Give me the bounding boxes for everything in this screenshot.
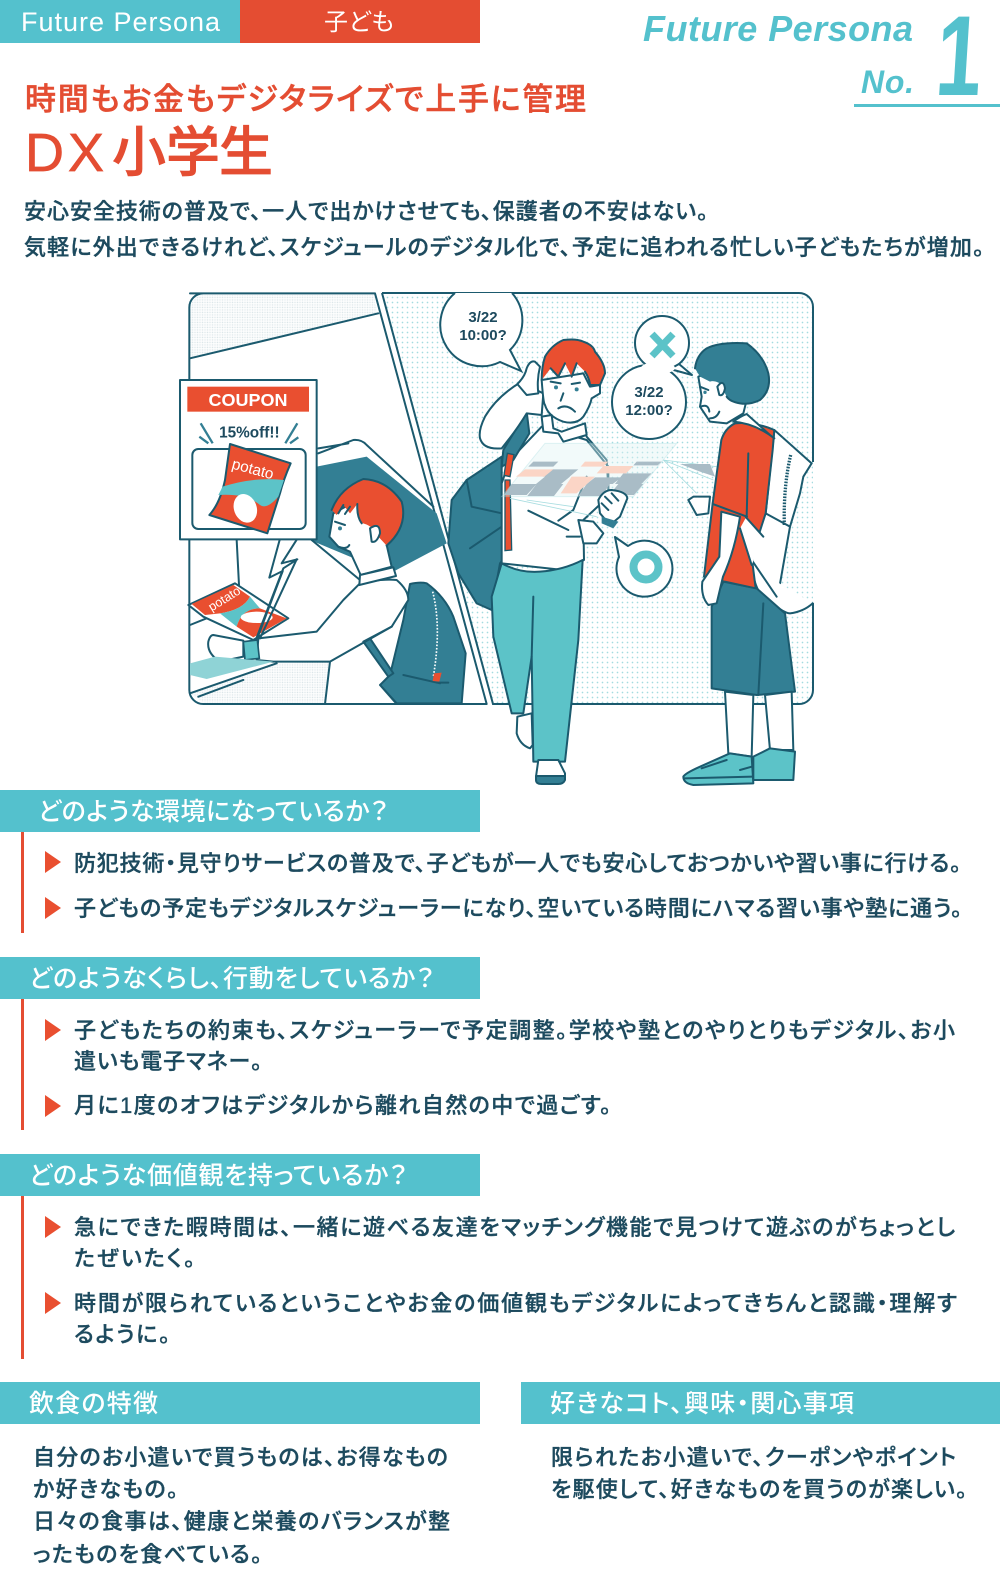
intro text: 安心安全技術の普及で、一人で出かけさせても、保護者の不安はない。 xyxy=(24,199,708,224)
illustration: children with digital schedule xyxy=(180,293,813,785)
persona number badge: No. xyxy=(861,64,914,100)
section: lifestyle: 子どもたちの約束も、スケジューラーで予定調整。学校や塾とのやりとりもデジタル、お小 xyxy=(74,1018,955,1043)
raised arm xyxy=(480,383,543,449)
section: values xyxy=(0,1154,957,1359)
panel: food and drink xyxy=(0,1382,480,1567)
section: environment: どのような環境になっているか？ xyxy=(38,798,388,826)
title: DX小学生 xyxy=(25,123,273,183)
shorts xyxy=(712,582,795,695)
header tab: category xyxy=(240,0,480,43)
section: values: たぜいたく。 xyxy=(74,1246,195,1271)
persona number badge: Future Persona xyxy=(643,8,913,49)
counter tray xyxy=(190,657,273,679)
white backpack xyxy=(752,430,812,593)
section: lifestyle xyxy=(0,957,955,1130)
panel: interests xyxy=(521,1382,1000,1502)
speech bubble: accepted xyxy=(615,537,672,597)
panel: interests: 限られたお小遣いで、クーポンやポイント xyxy=(551,1445,956,1470)
section: lifestyle: 月に1度のオフはデジタルから離れ自然の中で過ごす。 xyxy=(74,1093,611,1118)
pants xyxy=(492,560,583,762)
coupon card xyxy=(180,380,317,539)
speech bubble: 10:00: 10:00? xyxy=(459,327,507,344)
intro text: 気軽に外出できるけれど、スケジュールのデジタル化で、予定に追われる忙しい子どもたちが増加。 xyxy=(24,235,984,260)
section: environment xyxy=(0,790,962,933)
raised fist xyxy=(598,490,627,525)
speech lightning callout xyxy=(256,539,297,639)
projected schedule xyxy=(502,443,717,517)
speech bubble: rejected xyxy=(635,316,692,375)
white arm xyxy=(702,512,740,605)
head xyxy=(542,373,600,423)
speech bubble: 12:00 xyxy=(612,362,686,439)
subtitle: 時間もお金もデジタライズで上手に管理 xyxy=(25,82,586,117)
panel: food and drink: 日々の食事は、健康と栄養のバランスが整 xyxy=(33,1509,450,1534)
coupon card: potato xyxy=(230,456,276,483)
section: environment: 子どもの予定もデジタルスケジューラーになり、空いている時間にハマる習い事や塾に通う。 xyxy=(74,896,962,921)
shirt details xyxy=(528,437,608,537)
potato bag on counter xyxy=(188,583,288,640)
section: environment: 防犯技術・見守りサービスの普及で、子どもが一人でも安心しておつかいや習い事に行ける。 xyxy=(74,851,961,876)
section: lifestyle: どのようなくらし、行動をしているか？ xyxy=(29,965,434,993)
right boy xyxy=(683,343,813,785)
coupon card: COUPON xyxy=(209,390,287,410)
panel: interests: を駆使して、好きなものを買うのが楽しい。 xyxy=(551,1477,967,1502)
panel: food and drink: ったものを食べている。 xyxy=(33,1542,262,1567)
speech bubble: 12:00: 12:00? xyxy=(625,402,673,419)
dark backpack xyxy=(448,457,510,610)
shoes xyxy=(517,713,533,748)
header tab: Future Persona xyxy=(0,0,240,43)
left panel: shop scene xyxy=(180,293,487,704)
potato bag on counter: potato xyxy=(206,584,243,614)
coupon card: 15%off!! xyxy=(219,424,280,441)
panel: food and drink: か好きなもの。 xyxy=(33,1477,178,1502)
torso xyxy=(502,427,608,570)
section: values: 急にできた暇時間は、一緒に遊べる友達をマッチング機能で見つけて遊ぶのがちょっとし xyxy=(74,1215,955,1240)
middle boy xyxy=(448,339,717,784)
red shirt xyxy=(704,423,774,588)
speech bubble: 10:00: 3/22 xyxy=(468,309,498,326)
sneakers xyxy=(753,748,795,780)
header tab: Future Persona: Future Persona xyxy=(21,7,221,37)
header tab: category: 子ども xyxy=(324,9,394,36)
section: lifestyle: 遣いも電子マネー。 xyxy=(74,1049,262,1074)
section: values: 時間が限られているということやお金の価値観もデジタルによってきちんと認識・理解す xyxy=(74,1291,957,1316)
vending machine xyxy=(190,440,447,625)
speech bubble: 10:00 xyxy=(440,293,522,371)
background frame right panel xyxy=(382,293,813,704)
persona number badge xyxy=(643,0,1000,120)
boy at counter xyxy=(208,479,466,704)
panel: food and drink: 飲食の特徴 xyxy=(29,1390,158,1418)
speech bubble: 12:00: 3/22 xyxy=(634,384,664,401)
legs xyxy=(725,692,753,757)
section: values: るように。 xyxy=(74,1322,170,1347)
intro text xyxy=(24,199,984,260)
head xyxy=(698,367,750,423)
panel: interests: 好きなコト、興味・関心事項 xyxy=(550,1390,854,1418)
panel: food and drink: 自分のお小遣いで買うものは、お得なもの xyxy=(33,1445,448,1470)
section: values: どのような価値観を持っているか？ xyxy=(29,1162,407,1190)
